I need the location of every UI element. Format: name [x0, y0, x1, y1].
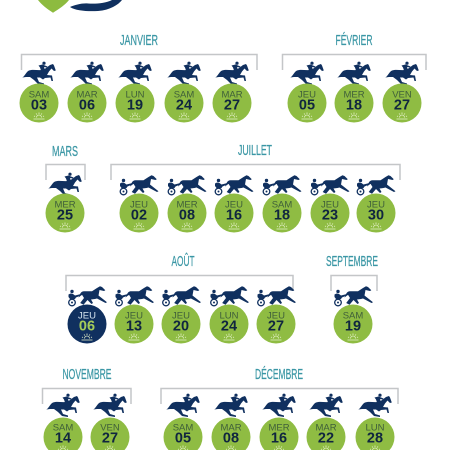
bracket: novembre: [42, 388, 131, 404]
date: sam 24: 24: [176, 98, 192, 114]
date: jeu 23: [310, 175, 350, 232]
section: aout: [66, 253, 296, 344]
section: janvier: [20, 33, 257, 122]
date: mar 22: 22: [318, 430, 334, 446]
date: lun 28: [356, 394, 394, 450]
date: jeu 30: JEU: [367, 200, 385, 210]
date: mar 06: MAR: [76, 90, 98, 100]
date: sam 05: SAM: [173, 422, 193, 434]
date: sam 03: [20, 62, 58, 122]
date: mar 08: [212, 394, 250, 450]
date: mer 18: 18: [346, 98, 362, 114]
date: sam 19: SAM: [343, 310, 363, 322]
date: sam 18: [262, 175, 302, 232]
date: jeu 30: 30: [368, 208, 384, 224]
date: jeu 05: [288, 62, 326, 122]
date: mer 25: [46, 173, 84, 232]
date: jeu 02: JEU: [130, 200, 148, 210]
date: lun 19: LUN: [125, 90, 145, 100]
date: lun 24: LUN: [219, 310, 239, 322]
date: jeu 27: [256, 286, 296, 344]
heading: novembre: NOVEMBRE: [62, 367, 112, 383]
date: jeu 16: [214, 175, 254, 232]
date: mar 27: 27: [224, 98, 240, 114]
date: sam 19: [334, 286, 373, 344]
date: jeu 06 highlighted: 06: [79, 318, 95, 334]
logo fragment: green heart: [38, 0, 69, 13]
heading: septembre: SEPTEMBRE: [326, 254, 378, 270]
date: jeu 23: JEU: [321, 200, 339, 210]
date: mer 18: MER: [343, 90, 365, 100]
date: jeu 20: [162, 286, 201, 344]
date: sam 05: 05: [175, 430, 191, 446]
date: jeu 27: 27: [268, 318, 284, 334]
date: ven 27: VEN: [392, 90, 412, 100]
date: lun 28: LUN: [365, 422, 385, 434]
heading: mars: MARS: [52, 144, 78, 160]
bracket: aout: [66, 276, 293, 291]
date: sam 05: [164, 394, 202, 450]
date: sam 14: SAM: [53, 422, 73, 434]
bracket: decembre: [161, 388, 398, 404]
date: mer 25: MER: [54, 200, 76, 210]
date: mer 25: 25: [57, 208, 73, 224]
date: sam 03: SAM: [29, 90, 49, 100]
date: jeu 20: JEU: [172, 310, 190, 322]
date: lun 24: 24: [221, 318, 237, 334]
heading: aout: AOÛT: [172, 253, 195, 270]
date: jeu 16: 16: [226, 208, 242, 224]
bracket: septembre: [331, 276, 377, 291]
date: jeu 16: JEU: [225, 200, 243, 210]
date: ven 27: VEN: [100, 422, 120, 434]
date: ven 27: 27: [394, 98, 410, 114]
date: sam 24: [164, 62, 204, 122]
date: sam 18: 18: [274, 208, 290, 224]
date: mer 08: 08: [179, 208, 195, 224]
section: mars: [46, 144, 85, 232]
date: jeu 06 highlighted: [68, 286, 107, 344]
date: mer 08: MER: [176, 200, 198, 210]
date: mar 08: MAR: [220, 422, 242, 434]
logo fragment: navy arc: [70, 0, 122, 11]
bracket: juillet: [111, 164, 400, 180]
date: sam 14: 14: [55, 430, 71, 446]
date: jeu 30: [356, 175, 396, 232]
heading: juillet: JUILLET: [238, 143, 272, 159]
date: sam 03: 03: [31, 98, 47, 114]
date: lun 19: [116, 62, 154, 122]
date: mar 22: MAR: [315, 422, 337, 434]
date: mar 27: MAR: [221, 90, 243, 100]
date: jeu 02: 02: [131, 208, 147, 224]
date: mer 08: [168, 175, 206, 232]
date: mar 22: [306, 394, 346, 450]
heading: fevrier: FÉVRIER: [336, 32, 372, 49]
date: jeu 13: JEU: [125, 310, 143, 322]
date: jeu 05: JEU: [298, 90, 316, 100]
date: jeu 06 highlighted: JEU: [78, 310, 96, 322]
date: mar 08: 08: [223, 430, 239, 446]
date: ven 27: [90, 394, 130, 450]
bracket: fevrier: [282, 54, 426, 70]
date: mer 16: [260, 394, 298, 450]
date: mer 18: [334, 62, 374, 122]
bracket: mars: [46, 164, 85, 180]
date: mar 06: [68, 62, 106, 122]
date: jeu 13: [114, 286, 154, 344]
date: ven 27: 27: [102, 430, 118, 446]
date: jeu 13: 13: [126, 318, 142, 334]
date: ven 27: [382, 62, 422, 122]
date: lun 28: 28: [367, 430, 383, 446]
date: lun 19: 19: [127, 98, 143, 114]
section: juillet: [111, 143, 400, 232]
date: lun 24: [210, 286, 249, 344]
date: jeu 20: 20: [173, 318, 189, 334]
date: sam 14: [44, 394, 82, 450]
section: fevrier: [282, 32, 426, 122]
date: mer 16: 16: [271, 430, 287, 446]
section: decembre: [161, 366, 398, 450]
date: jeu 02: [120, 175, 158, 232]
date: jeu 23: 23: [322, 208, 338, 224]
section: novembre: [42, 367, 131, 450]
heading: janvier: JANVIER: [120, 33, 158, 49]
date: sam 24: SAM: [174, 90, 194, 100]
date: mer 16: MER: [268, 422, 290, 434]
date: sam 18: SAM: [272, 200, 292, 210]
bracket: janvier: [22, 54, 257, 70]
heading: decembre: DÉCEMBRE: [255, 366, 303, 383]
date: jeu 27: JEU: [267, 310, 285, 322]
date: jeu 05: 05: [299, 98, 315, 114]
date: sam 19: 19: [345, 318, 361, 334]
date: mar 06: 06: [79, 98, 95, 114]
section: septembre: [326, 254, 378, 344]
date: mar 27: [212, 62, 252, 122]
